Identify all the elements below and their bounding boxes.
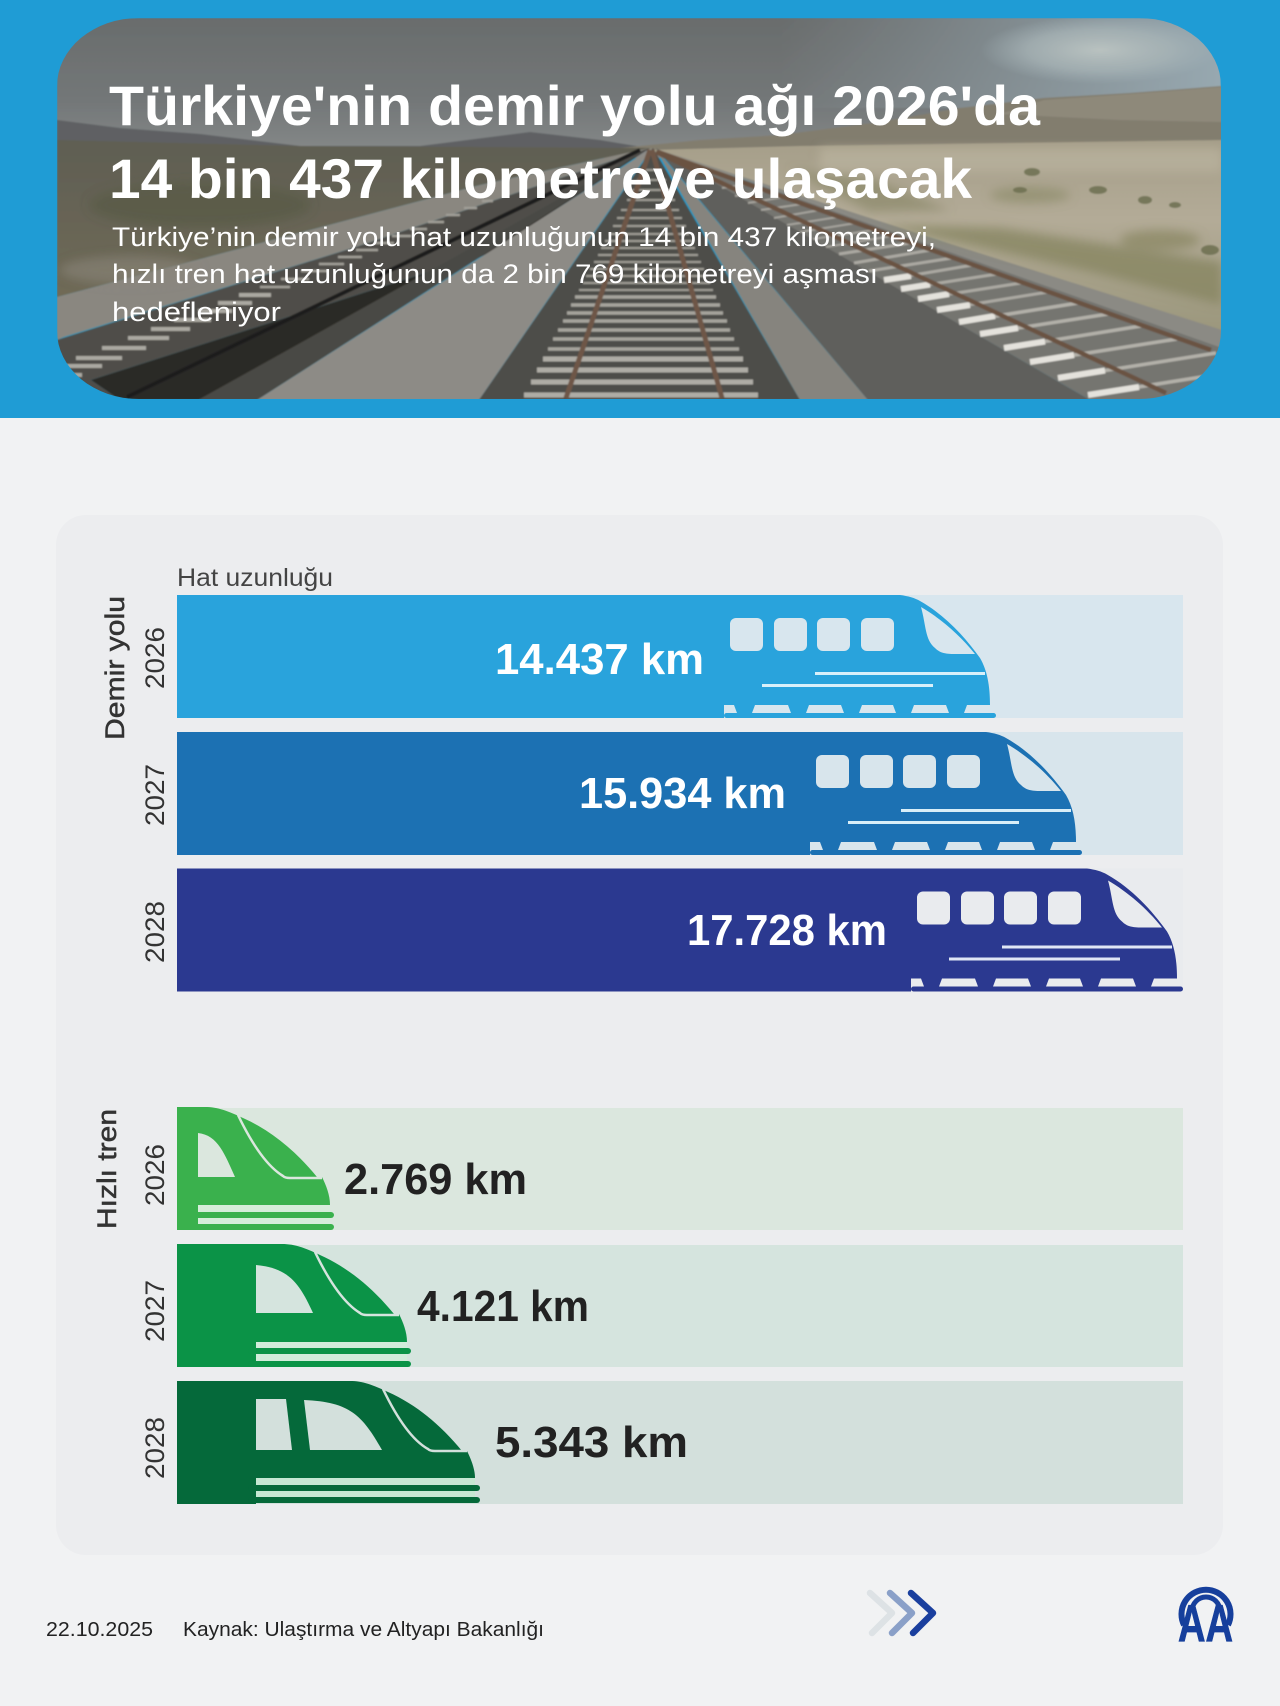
row: Hızlı tren 2026 xyxy=(140,1107,1183,1230)
header photo: railway tracks xyxy=(32,16,1258,400)
icon: chevrons xyxy=(870,1593,933,1633)
bar with train icon xyxy=(177,732,1082,855)
year label 2026: 2026 xyxy=(140,627,170,689)
value 14.437 km: 14.437 km xyxy=(495,635,704,684)
header band xyxy=(0,0,1280,418)
bar with train icon xyxy=(177,868,1183,992)
row: Demir yolu 2027 xyxy=(140,732,1183,855)
subtitle: Türkiye’nin demir yolu hat uzunluğunun 14 bin 437 kilometreyi, xyxy=(112,222,936,252)
icon: AA logo: AA xyxy=(1178,1595,1233,1653)
axis heading: Hat uzunluğu: Hat uzunluğu xyxy=(177,564,333,592)
title: Türkiye'nin demir yolu ağı 2026'da xyxy=(109,74,1041,137)
green train icon xyxy=(177,1381,480,1504)
value 15.934 km: 15.934 km xyxy=(579,769,786,818)
title: 14 bin 437 kilometreye ulaşacak xyxy=(109,147,973,210)
icon: AA logo xyxy=(1178,1590,1233,1653)
value 2.769 km: 2.769 km xyxy=(344,1155,527,1204)
green train icon xyxy=(177,1107,334,1230)
year label 2027: 2027 xyxy=(140,1280,170,1342)
row: Demir yolu 2026 xyxy=(140,595,1183,718)
bar with train icon xyxy=(177,595,996,718)
group label: Demir yolu: Demir yolu xyxy=(100,596,130,740)
year label 2028: 2028 xyxy=(140,1417,170,1479)
footer: date: 22.10.2025 xyxy=(46,1619,153,1641)
year label 2027: 2027 xyxy=(140,764,170,826)
footer: source: Kaynak: Ulaştırma ve Altyapı Bakanlığı xyxy=(183,1619,544,1641)
subtitle: hedefleniyor xyxy=(112,297,281,327)
year label 2028: 2028 xyxy=(140,901,170,963)
green train icon xyxy=(177,1244,411,1367)
value 17.728 km: 17.728 km xyxy=(687,906,887,955)
year label 2026: 2026 xyxy=(140,1144,170,1206)
group label: Hızlı tren: Hızlı tren xyxy=(92,1109,122,1229)
subtitle xyxy=(112,222,936,327)
value 5.343 km: 5.343 km xyxy=(495,1418,688,1467)
row: Hızlı tren 2027 xyxy=(140,1244,1183,1367)
panel: chart card xyxy=(56,515,1223,1555)
subtitle: hızlı tren hat uzunluğunun da 2 bin 769 kilometreyi aşması xyxy=(112,259,878,289)
row: Demir yolu 2028 xyxy=(140,868,1183,992)
value 4.121 km: 4.121 km xyxy=(417,1282,589,1331)
title xyxy=(109,74,1041,210)
row: Hızlı tren 2028 xyxy=(140,1381,1183,1504)
